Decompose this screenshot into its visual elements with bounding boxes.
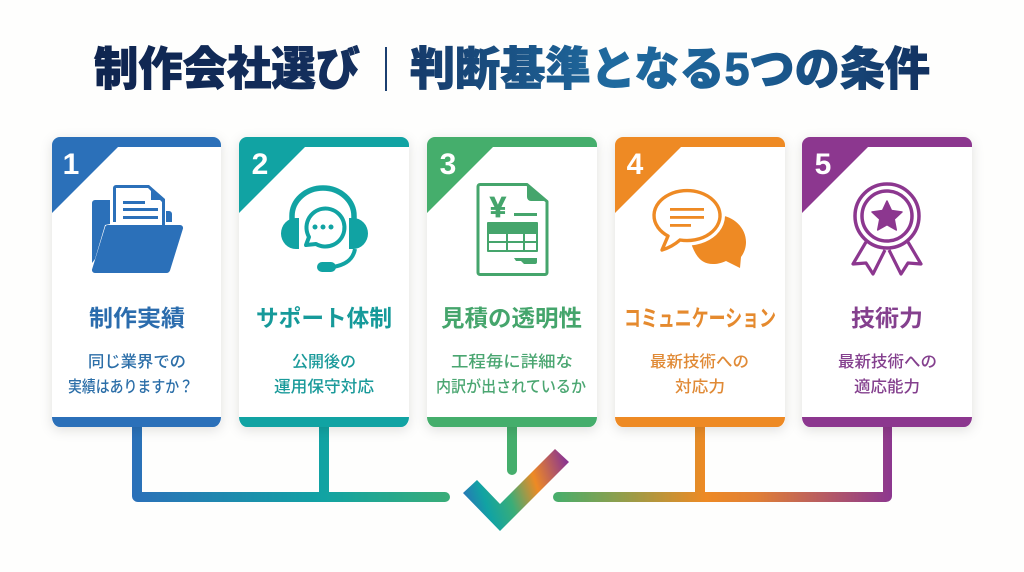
number 2: 2 <box>252 148 268 181</box>
title: 判断基準となる5つの条件 <box>410 43 930 95</box>
connector: right gradient line <box>553 427 892 502</box>
card description: 工程毎に詳細な <box>451 353 573 371</box>
card description <box>436 353 586 396</box>
number 1: 1 <box>63 148 79 181</box>
panel: card 3 見積の透明性 <box>427 137 597 427</box>
card description: 最新技術への <box>650 353 749 371</box>
card description: 同じ業界での <box>88 353 186 371</box>
card description: 運用保守対応 <box>274 378 374 396</box>
card description: 公開後の <box>292 353 356 371</box>
icon: award medal with star <box>853 184 921 274</box>
number 3: 3 <box>440 148 456 181</box>
card title: 見積の透明性 <box>441 305 582 331</box>
card description <box>838 353 937 396</box>
title <box>94 43 930 95</box>
card title: サポート体制 <box>256 305 392 331</box>
card description: 適応能力 <box>854 378 920 396</box>
number 5: 5 <box>815 148 831 181</box>
icon: estimate document with yen mark <box>478 184 548 274</box>
card description: 最新技術への <box>838 353 937 371</box>
icon: estimate document with yen mark: ¥ <box>490 192 506 224</box>
connector: center green line <box>507 427 517 475</box>
card title: 制作実績 <box>89 305 185 331</box>
panel: card 5 技術力 <box>802 137 972 427</box>
number 4: 4 <box>627 148 644 181</box>
icon: headset with chat bubble <box>281 188 368 272</box>
panel: card 1 制作実績 <box>52 137 221 427</box>
icon: gradient check mark <box>463 449 569 531</box>
panel: card 4 コミュニケーション <box>615 137 785 427</box>
card title: コミュニケーション <box>624 305 776 331</box>
panel: card 2 サポート体制 <box>239 137 409 427</box>
card description: 対応力 <box>675 378 725 396</box>
card description <box>274 353 374 396</box>
card description <box>650 353 749 396</box>
connector: left gradient line <box>132 427 450 502</box>
card description: 内訳が出されているか <box>436 377 586 396</box>
card title: 技術力 <box>851 305 923 331</box>
title: 制作会社選び <box>94 43 360 95</box>
card description <box>68 353 193 396</box>
card description: 実績はありますか？ <box>68 378 193 396</box>
icon: speech bubbles <box>654 191 746 268</box>
icon: folder with document <box>92 185 183 273</box>
